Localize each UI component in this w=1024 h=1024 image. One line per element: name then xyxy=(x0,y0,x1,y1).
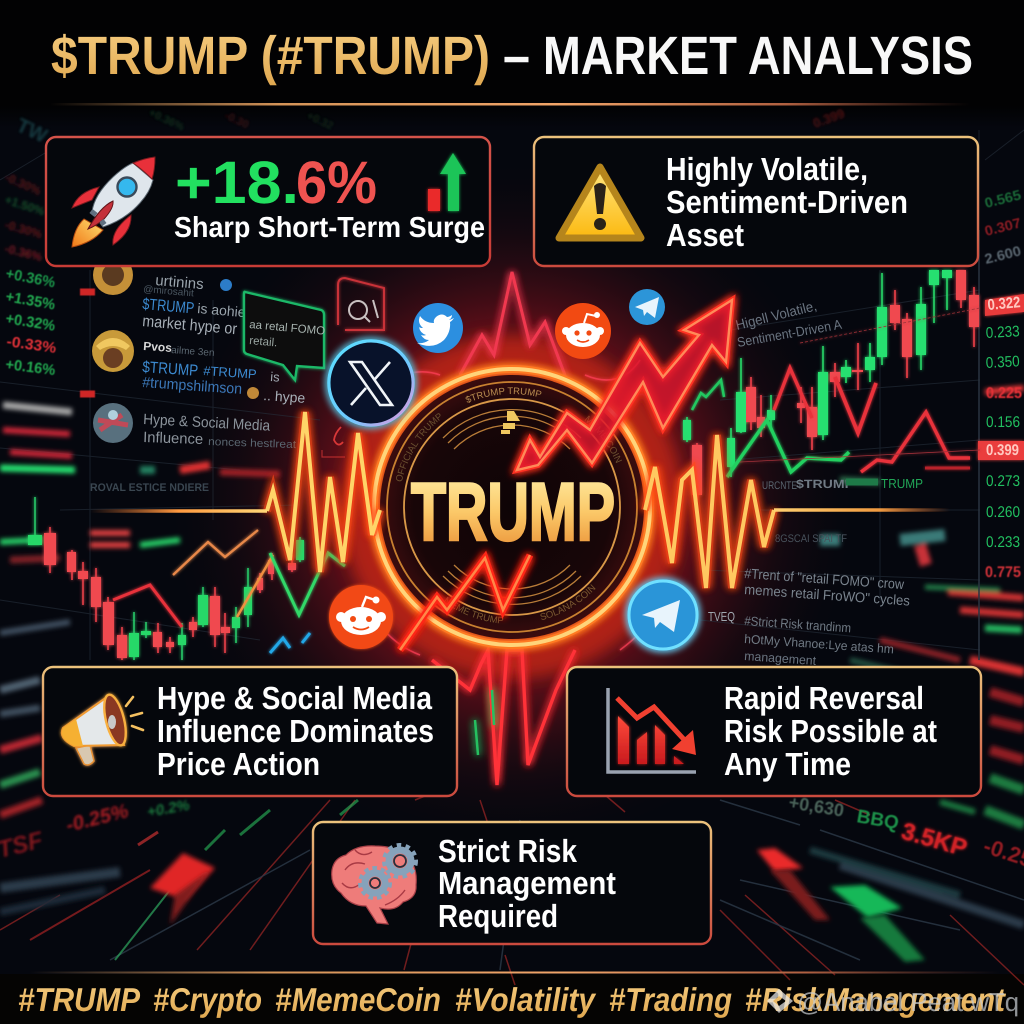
lower ticker text left: +0.2% xyxy=(146,797,191,821)
title divider xyxy=(50,103,970,106)
footer hashtags: #Trading xyxy=(609,981,732,1018)
right side ghost text: management xyxy=(744,649,817,668)
panel text: Management xyxy=(438,865,616,901)
panel text xyxy=(724,680,937,782)
panel text xyxy=(438,833,616,934)
coin ring lettering xyxy=(396,387,622,624)
coin rim xyxy=(374,369,650,645)
left price lines xyxy=(113,530,345,653)
panel text: Risk Possible at xyxy=(724,713,937,749)
small red dots xyxy=(80,292,95,394)
coin inner rings xyxy=(387,382,637,632)
right price lines xyxy=(692,308,980,477)
coin rim glow xyxy=(374,369,650,645)
feed post 1: $TRUMP xyxy=(142,296,195,318)
price axis right: 0.233 xyxy=(986,534,1020,551)
panel text: Hype & Social Media xyxy=(157,680,432,716)
feed post 3: nonces hestlreat xyxy=(208,436,296,451)
green chat bubble: retail. xyxy=(249,335,278,349)
left ticker percent list: -0.33% xyxy=(5,333,57,357)
icon: telegram top xyxy=(629,289,665,325)
left candlestick chart xyxy=(28,497,345,660)
panel: hype and social media xyxy=(43,667,457,796)
coin ring lettering: MEME TRUMP xyxy=(444,596,504,624)
panel text: Required xyxy=(438,898,558,934)
caption: Sharp Short-Term Surge xyxy=(174,212,485,244)
icon: megaphone xyxy=(62,693,143,765)
title: – xyxy=(503,26,530,86)
feed post 1 xyxy=(142,272,246,338)
faint top tickers: TW xyxy=(13,115,50,148)
stat value: 6% xyxy=(296,149,377,216)
green chat bubble xyxy=(244,292,326,380)
price tag red 0.399: 0.399 xyxy=(986,442,1019,459)
faint top tickers: 0.399 xyxy=(811,106,847,131)
price axis right: 0.156 xyxy=(986,414,1020,431)
green chat bubble: aa retal FOMO xyxy=(249,319,326,338)
feed post 2: is xyxy=(270,369,281,385)
avatar 3 xyxy=(93,403,133,443)
title xyxy=(51,26,973,86)
feed post 3: Hype & Social Media xyxy=(143,411,271,435)
upper right price values: 2.600 xyxy=(983,242,1023,267)
feed post 1: market hype or xyxy=(142,313,238,338)
coin wordmark: TRUMP xyxy=(411,467,615,558)
panel: highly volatile xyxy=(534,137,978,266)
icon: falling chart xyxy=(608,688,696,772)
price axis right: 0.775 xyxy=(985,564,1021,581)
panel text xyxy=(666,151,908,253)
faint top tickers: +0.36% xyxy=(147,107,186,134)
coin face xyxy=(380,375,644,639)
right side ghost text: Sentiment-Driven A xyxy=(736,317,843,350)
coin engraved arcs xyxy=(443,410,581,604)
feed post 2: .. hype xyxy=(263,387,306,406)
panel text xyxy=(157,680,434,782)
avatar 2 xyxy=(92,330,134,372)
lower ticker text right: +0,630 xyxy=(787,792,845,821)
footer hashtags: #Crypto xyxy=(153,981,262,1018)
right side ghost text: hOtMy Vhanoe:Lye atas hm xyxy=(744,632,894,656)
coin ring lettering: SOLANA COIN xyxy=(540,584,596,620)
stat value xyxy=(175,149,377,216)
left ticker percent list: -0.30% xyxy=(3,217,44,241)
feed post 2: ailme 3en xyxy=(171,345,215,359)
panel text: Price Action xyxy=(157,746,320,782)
lower ticker text left: -0.25% xyxy=(64,800,131,837)
price axis right: 0.273 xyxy=(986,473,1020,490)
panel: strict risk management xyxy=(313,822,711,944)
avatar 1 xyxy=(93,255,133,295)
footer hashtags xyxy=(18,981,1007,1018)
watermark: @Anabel Peat wTq xyxy=(797,987,1019,1017)
feed post 2: #trumpshilmson xyxy=(142,374,243,398)
perspective red and green bars xyxy=(150,848,925,962)
right candlestick chart xyxy=(683,270,980,500)
icon: X logo xyxy=(329,341,413,425)
faint top tickers: +0.32 xyxy=(305,110,335,132)
price axis right xyxy=(978,230,1024,660)
footer hashtags: #MemeCoin xyxy=(275,981,441,1018)
red glow field behind the coin xyxy=(340,335,684,679)
right side ghost text: memes retail FroWO" cycles xyxy=(744,581,911,609)
left ticker percent list: +0.32% xyxy=(4,310,56,335)
right side ghost text: 8GSCAI SPAI TF xyxy=(775,533,847,545)
feed post 3: Influence xyxy=(143,429,203,448)
faint top tickers xyxy=(13,106,847,148)
right side ghost text: TRUMP xyxy=(881,476,923,491)
upper right price values xyxy=(983,186,1023,267)
right side ghost text: URCNTE xyxy=(762,480,797,492)
panel: rapid reversal risk xyxy=(567,667,981,796)
price axis right: 0.260 xyxy=(986,504,1020,521)
left ticker percent list: -0.36% xyxy=(3,241,44,264)
feed post 3 xyxy=(143,411,296,451)
feed post 2: #TRUMP xyxy=(203,363,257,382)
feed post 2 xyxy=(142,339,306,406)
lower ticker text left xyxy=(0,797,191,864)
panel text: Asset xyxy=(666,217,744,253)
panel text: Sentiment-Driven xyxy=(666,184,908,220)
title: $TRUMP (#TRUMP) xyxy=(51,26,490,86)
lower red zigzag arrow xyxy=(400,555,530,650)
red app icon outline xyxy=(338,278,384,330)
coin ring lettering: $TRUMP TRUMP xyxy=(466,387,542,403)
left ticker percent list: +0.36% xyxy=(4,265,57,291)
lower ticker text right: 3.5KP xyxy=(898,818,970,862)
icon: reddit top xyxy=(555,303,611,359)
red spikes below the coin xyxy=(432,650,575,785)
left ticker percent list: +0.16% xyxy=(5,356,56,379)
heartbeat line right xyxy=(645,435,950,588)
right side ghost text xyxy=(708,297,923,668)
lower ticker text right xyxy=(787,792,1024,872)
icon: brain with gears xyxy=(332,845,416,924)
feed caption: ROVAL ESTICE NDIERE xyxy=(90,482,209,494)
icon: rocket xyxy=(72,157,155,247)
price axis right: 0.225 xyxy=(986,385,1022,402)
left ticker percent list: -0.30% xyxy=(3,170,44,198)
coin emblem xyxy=(501,411,520,434)
faint top tickers: -0.30 xyxy=(223,110,251,131)
coin ring lettering: MEME COIN xyxy=(584,416,622,463)
icon: twitter bird xyxy=(413,303,463,353)
left ticker percent list: +1.35% xyxy=(4,288,56,314)
upper right price values: 0.565 xyxy=(983,186,1023,211)
coin ring lettering: OFFICIAL TRUMP xyxy=(396,413,440,482)
left ticker percent list xyxy=(3,170,57,379)
right side ghost text: #Trent of "retail FOMO" crow xyxy=(744,565,905,592)
right side ghost text: $TRUMP xyxy=(796,477,854,491)
lower ticker text right: BBQ xyxy=(855,806,900,834)
blurred motion streaks left xyxy=(0,405,280,912)
panel text: Rapid Reversal xyxy=(724,680,924,716)
right side ghost text: Higell Volatile, xyxy=(734,297,818,333)
icon: telegram bottom xyxy=(629,581,697,649)
footer hashtags: #Volatility xyxy=(455,981,596,1018)
price axis right: 0.350 xyxy=(985,353,1020,372)
left ticker percent list: +1.50% xyxy=(3,193,47,219)
panel text: Strict Risk xyxy=(438,833,577,869)
red spikes above the coin xyxy=(460,272,566,378)
feed post 1: urtinins xyxy=(155,272,204,293)
panel text: Any Time xyxy=(724,746,851,782)
feed post 1: @mirosahit xyxy=(143,284,194,299)
icon: warning triangle xyxy=(559,167,641,238)
icon: up arrow and bar xyxy=(428,153,466,211)
coin xyxy=(367,359,659,655)
panel text: Influence Dominates xyxy=(157,713,434,749)
footer hashtags: #TRUMP xyxy=(18,981,141,1018)
rising red arrow xyxy=(517,300,732,470)
icon: reddit bottom xyxy=(329,585,393,649)
feed post 2: $TRUMP xyxy=(142,359,199,380)
small red hook sketch xyxy=(322,427,345,457)
blurred motion streaks right xyxy=(810,388,1024,925)
panel text: Highly Volatile, xyxy=(666,151,868,187)
footer divider xyxy=(30,972,1000,974)
social feed panel xyxy=(80,255,306,494)
heartbeat line left xyxy=(90,412,380,572)
upper right price values: 0.307 xyxy=(983,214,1023,239)
feed post 2: Pvos xyxy=(143,339,173,355)
right side ghost text: TVEQ xyxy=(708,609,735,624)
feed post 1: is aohie xyxy=(197,300,246,320)
stat value: +18. xyxy=(175,149,299,216)
panel: sharp short-term surge xyxy=(46,137,490,266)
price axis right: 0.233 xyxy=(985,323,1020,342)
right side ghost text: #Strict Risk trandinm xyxy=(744,613,852,635)
